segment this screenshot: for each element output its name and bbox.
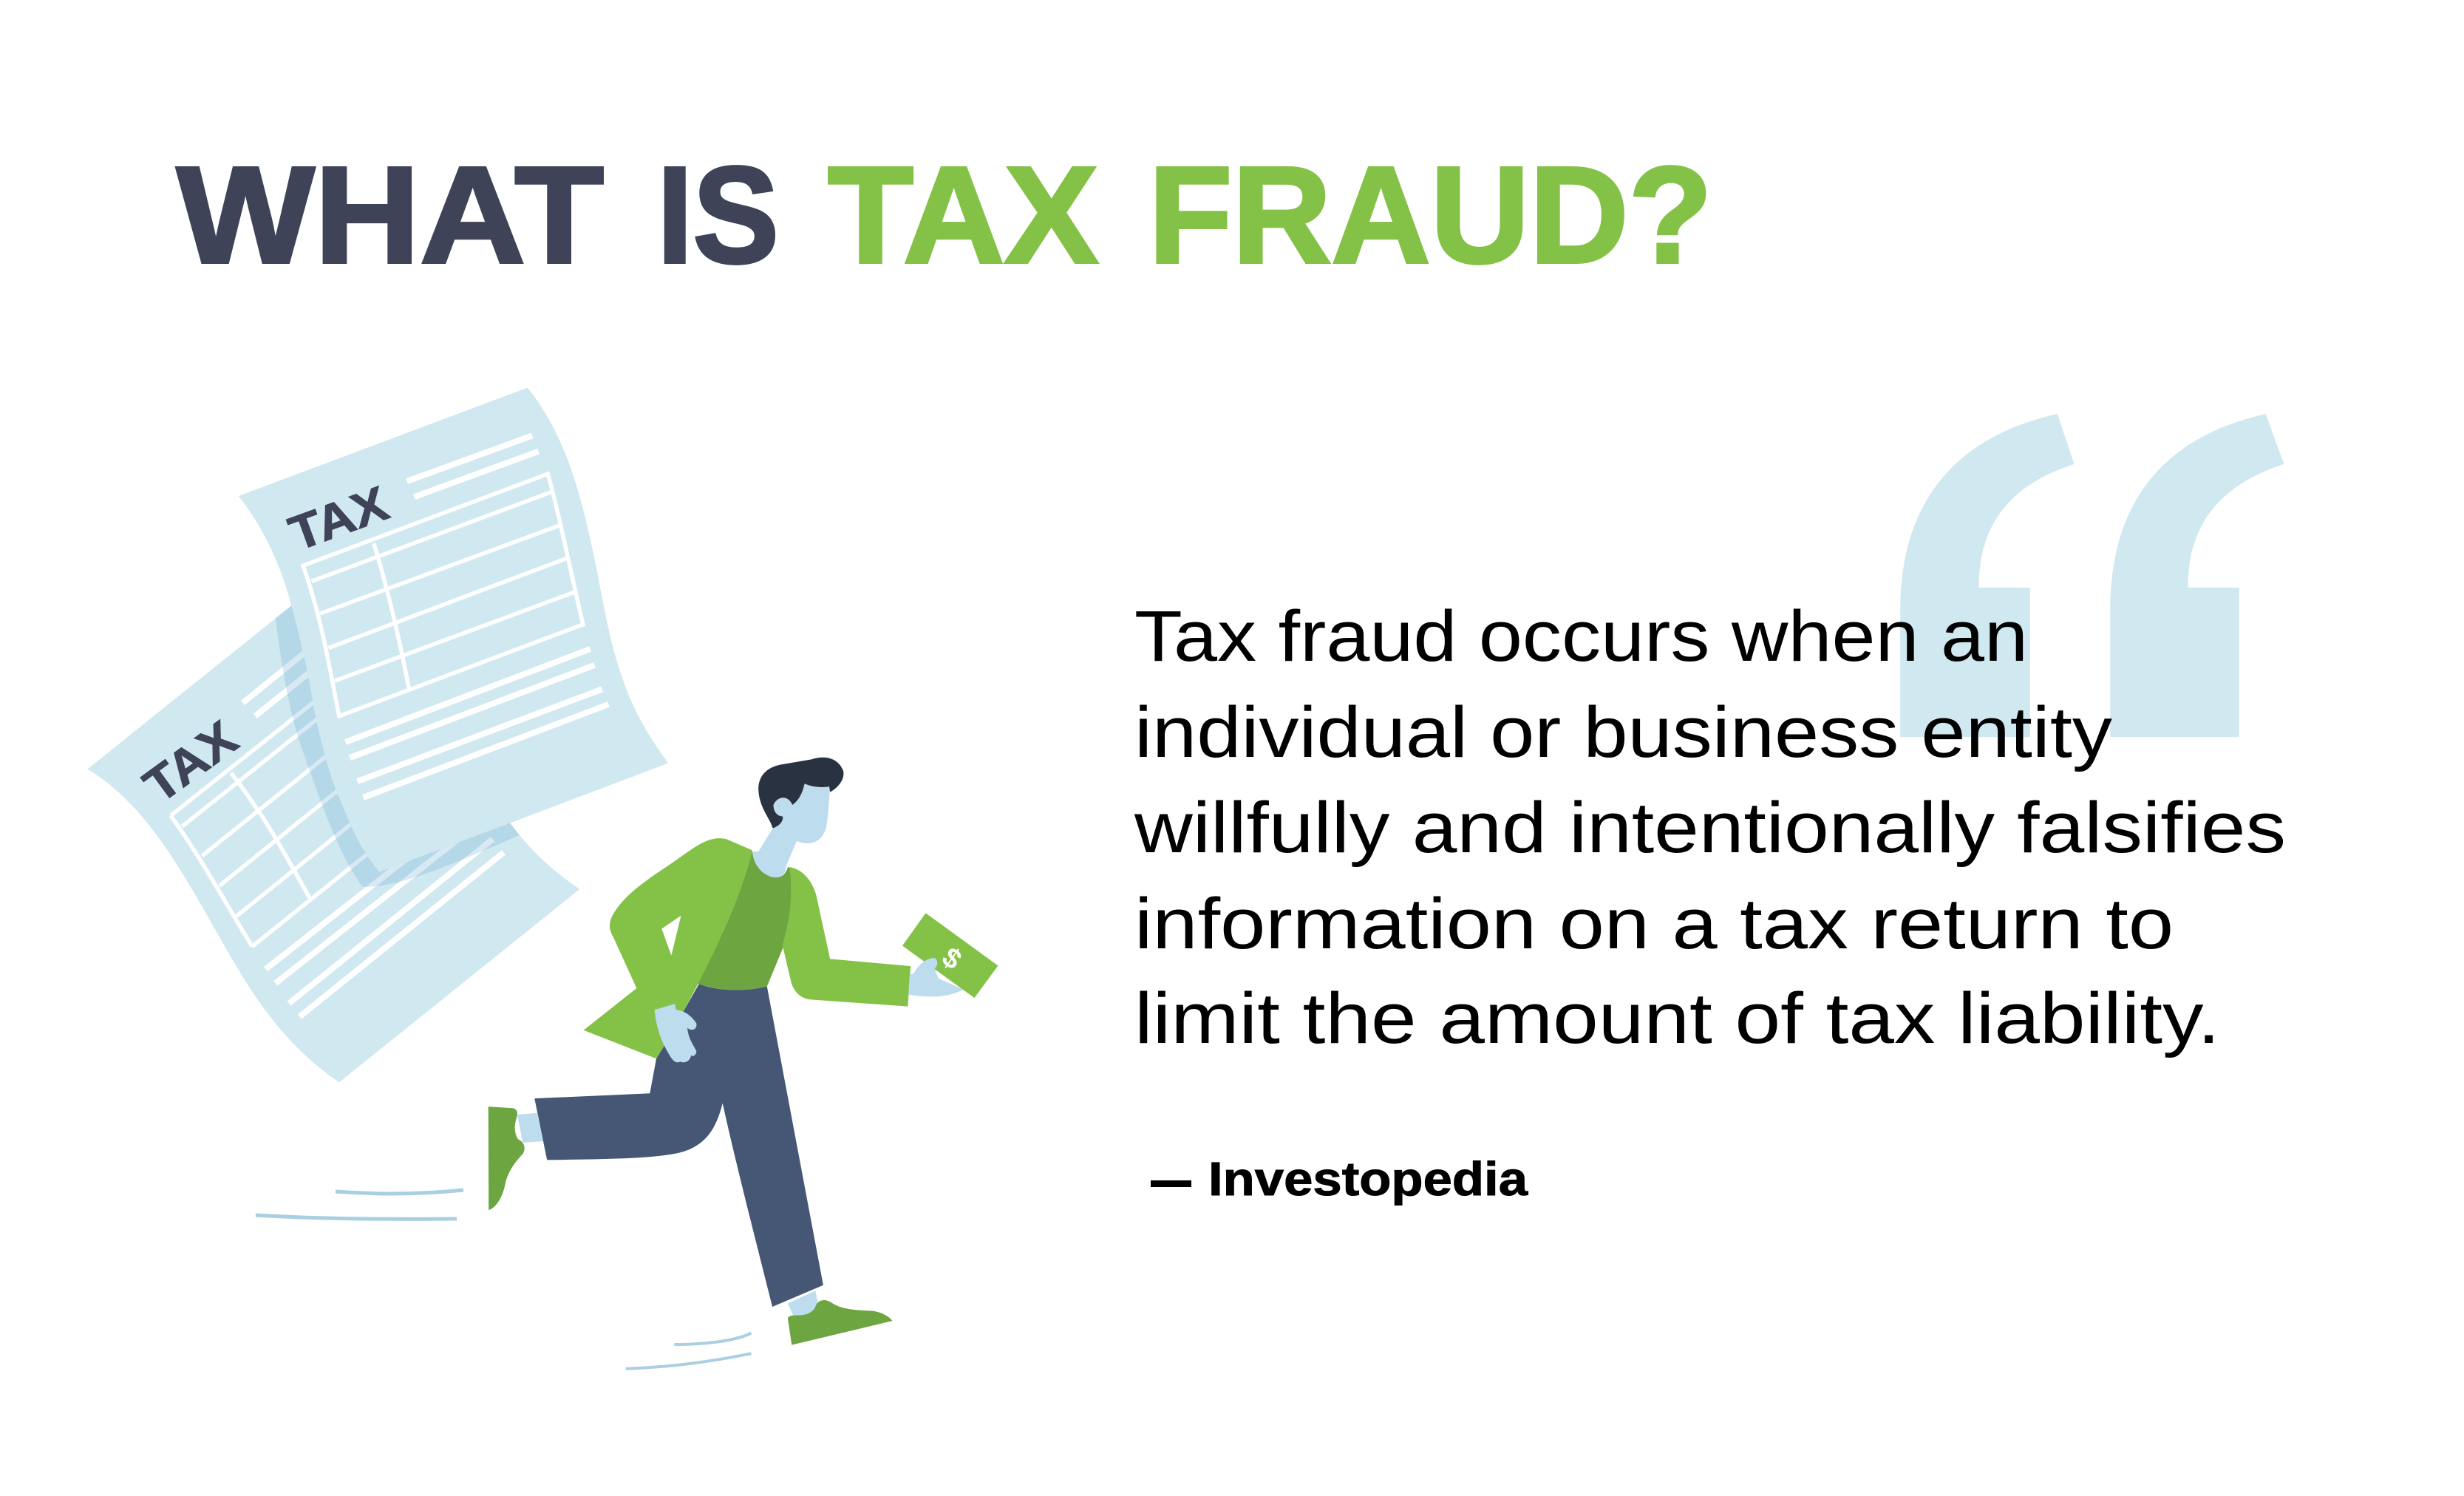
thumb	[914, 958, 940, 983]
lower hand	[655, 1004, 696, 1062]
TAX label, back form: TAX	[134, 710, 247, 813]
quote text: Tax fraud occurs when an	[1134, 596, 2028, 676]
extended arm	[783, 867, 911, 1007]
quote text: limit the amount of tax liability.	[1134, 978, 2220, 1058]
illustration: motion lines behind front foot	[626, 1333, 751, 1369]
trousers	[534, 984, 823, 1307]
title: IS	[657, 139, 779, 292]
head and neck	[752, 783, 830, 877]
TAX label, front form: TAX	[282, 475, 395, 561]
back shoe	[489, 1106, 525, 1210]
decorative quotation mark	[1900, 414, 2284, 737]
illustration: running man	[489, 758, 998, 1345]
illustration: front tax form	[239, 387, 668, 872]
front sock	[788, 1291, 820, 1319]
dollar bill	[902, 913, 998, 998]
back sock	[517, 1113, 543, 1143]
title	[177, 139, 1712, 292]
illustration: back tax form	[87, 487, 579, 1082]
hair	[758, 758, 843, 829]
shirt	[687, 850, 793, 990]
hand holding bill	[908, 973, 963, 996]
illustration: motion lines behind back foot	[256, 1190, 463, 1219]
front shoe	[788, 1300, 892, 1345]
quote text: information on a tax return to	[1134, 883, 2174, 964]
quote text: individual or business entity	[1134, 692, 2113, 772]
quote attribution: Investopedia	[1208, 1152, 1528, 1206]
title: FRAUD?	[1148, 139, 1712, 292]
title: TAX	[828, 139, 1098, 292]
title: WHAT	[177, 139, 604, 292]
dollar sign on bill: $	[936, 942, 967, 976]
jacket	[584, 838, 752, 1058]
illustration: shadow between forms	[276, 606, 520, 887]
quote text: willfully and intentionally falsifies	[1134, 787, 2286, 868]
quote text	[1134, 596, 2286, 1058]
